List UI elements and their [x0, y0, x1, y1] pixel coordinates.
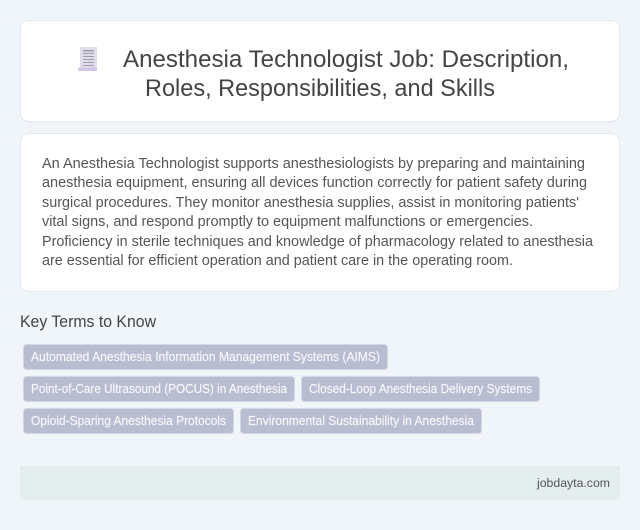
description text: surgical procedures. They monitor anesthesia supplies, assist in monitoring patients' [42, 195, 579, 211]
chip: opioid-sparing: Opioid-Sparing Anesthesia Protocols [31, 414, 226, 428]
description text [42, 156, 594, 269]
panel: description [20, 134, 620, 292]
description text: are essential for efficient operation and patient care in the operating room. [42, 253, 513, 269]
chip: AIMS: Automated Anesthesia Information Management Systems (AIMS) [31, 350, 380, 364]
chip: closed-loop [302, 376, 540, 402]
description text: An Anesthesia Technologist supports anesthesiologists by preparing and maintaining [42, 156, 585, 172]
chip: POCUS [24, 376, 294, 402]
title: Anesthesia Technologist Job: Description, [123, 46, 569, 73]
chip: sustainability [240, 408, 482, 434]
chip: sustainability: Environmental Sustainability in Anesthesia [248, 414, 474, 428]
chip: closed-loop: Closed-Loop Anesthesia Delivery Systems [309, 382, 532, 396]
panel: title card [20, 20, 620, 122]
chip: opioid-sparing [24, 408, 234, 434]
chip: AIMS [24, 344, 388, 370]
icon: document scroll [78, 47, 97, 71]
footer [20, 466, 620, 500]
heading: key terms: Key Terms to Know [20, 313, 156, 331]
title [123, 46, 569, 102]
description text: anesthesia equipment, ensuring all devices function correctly for patient safety during [42, 175, 587, 191]
footer: jobdayta.com [536, 476, 610, 490]
chip: POCUS: Point-of-Care Ultrasound (POCUS) in Anesthesia [31, 382, 287, 396]
key term chips [24, 344, 540, 434]
title: Roles, Responsibilities, and Skills [145, 75, 495, 102]
description text: vital signs, and respond promptly to equipment malfunctions or emergencies. [42, 214, 533, 230]
description text: Proficiency in sterile techniques and knowledge of pharmacology related to anesthesia [42, 234, 594, 250]
